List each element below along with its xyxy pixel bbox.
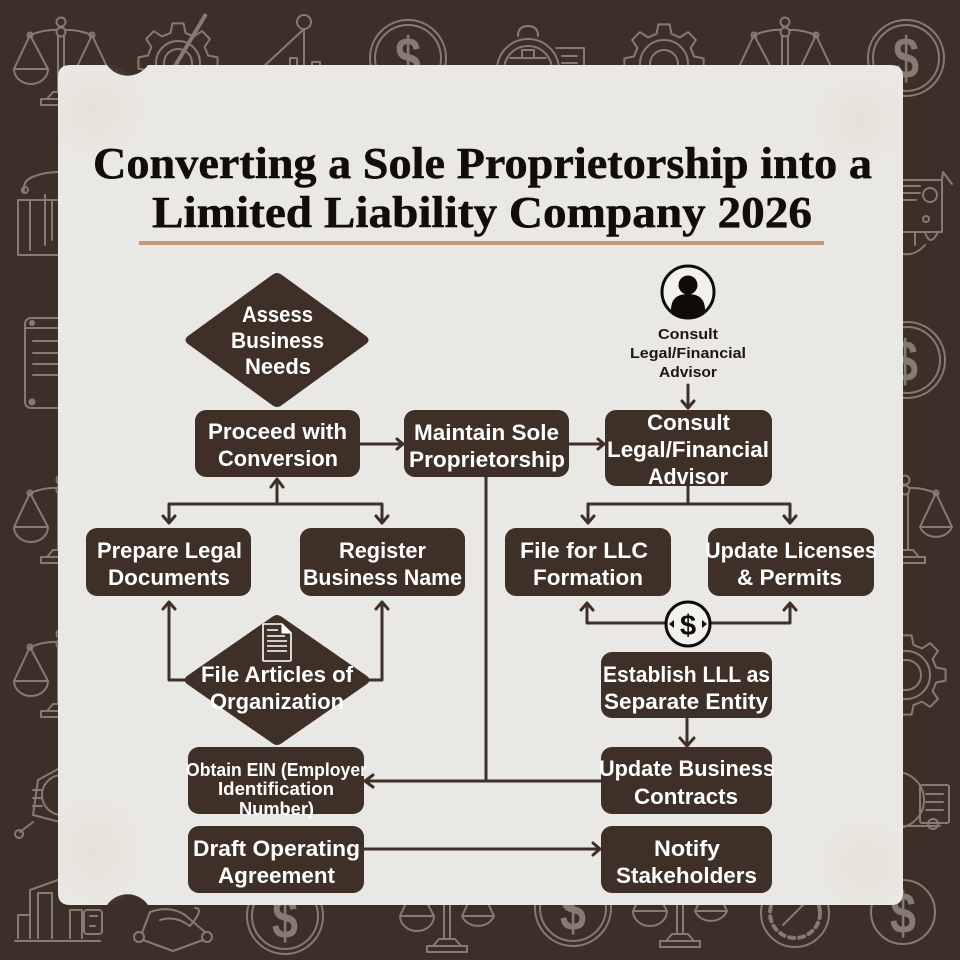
- step: Register Business Name: Register: [339, 538, 426, 563]
- icon: document panel: [25, 318, 75, 408]
- step: Register Business Name: Business Name: [303, 565, 462, 590]
- icon: dollar coin connector: $: [680, 610, 696, 642]
- icon: growth chart: [262, 15, 320, 68]
- icon: dollar coin top: [370, 20, 446, 96]
- icon: dollar coin connector: [666, 602, 710, 646]
- title: [93, 139, 872, 237]
- step: Register Business Name: [300, 528, 465, 596]
- icon: advisor person: [662, 266, 714, 318]
- title: Limited Liability Company 2026: [152, 188, 812, 237]
- icon: scales top left: [14, 18, 108, 105]
- icon: dollar coin right: [869, 322, 945, 398]
- icon: scales top right: [738, 18, 832, 105]
- step: Proceed with Conversion: Conversion: [218, 446, 338, 471]
- step: Obtain EIN: Number): [239, 799, 314, 819]
- icon: dollar coin top: $: [395, 26, 421, 91]
- step: Prepare Legal Documents: Prepare Legal: [97, 538, 242, 563]
- step: Consult Legal/Financial Advisor: Legal/Financial: [607, 437, 769, 462]
- decision: File Articles of Organization: Organization: [210, 689, 344, 714]
- step: Establish LLL as Separate Entity: Establish LLL as: [603, 662, 770, 687]
- icon: machine left: [15, 768, 82, 838]
- icon: gear with needle: [138, 14, 218, 103]
- advisor caption: Consult: [658, 326, 718, 343]
- icon: dollar coin top right: $: [893, 26, 919, 91]
- title underline: [139, 241, 824, 245]
- icon: dollar coin right: $: [892, 329, 918, 394]
- connector arrows: [163, 385, 796, 855]
- decision: File Articles of Organization: File Articles of: [201, 662, 354, 687]
- advisor caption: [630, 326, 746, 381]
- step: Proceed with Conversion: Proceed with: [208, 419, 347, 444]
- step: Consult Legal/Financial Advisor: Consult: [647, 410, 731, 435]
- icon: books: [18, 172, 60, 255]
- step: Update Licenses and Permits: Update Licenses: [705, 538, 877, 563]
- step: Draft Operating Agreement: Draft Operating: [193, 836, 360, 861]
- title: Converting a Sole Proprietorship into a: [93, 139, 872, 188]
- advisor caption: Legal/Financial: [630, 345, 746, 362]
- icon: bar chart building: [15, 880, 102, 941]
- step: Prepare Legal Documents: Documents: [108, 565, 230, 590]
- advisor caption: Advisor: [659, 364, 717, 381]
- step: Update Business Contracts: [599, 747, 775, 814]
- step: File for LLC Formation: File for LLC: [520, 538, 648, 563]
- step: Maintain Sole Proprietorship: Proprietorship: [409, 447, 565, 472]
- step: Obtain EIN: Obtain EIN (Employer: [186, 760, 367, 780]
- step: Update Business Contracts: Contracts: [634, 784, 738, 809]
- icon: dollar coin bottom 1: $: [272, 886, 298, 951]
- step: Notify Stakeholders: Notify: [654, 836, 721, 861]
- icon: document: [263, 624, 291, 661]
- step: Obtain EIN: Identification: [218, 779, 334, 799]
- icon: printer right: [900, 172, 952, 254]
- icon: scales bottom 2: [633, 860, 727, 947]
- icon: scales left upper: [14, 476, 108, 563]
- icon: scales right: [858, 476, 952, 563]
- icon: handshake: [134, 908, 212, 951]
- step: Establish LLL as Separate Entity: [601, 652, 772, 718]
- step: Consult Legal/Financial Advisor: Advisor: [648, 464, 728, 489]
- icon: dollar coin bottom 2: $: [560, 878, 586, 943]
- icon: dollar coin bottom right: [871, 880, 935, 946]
- step: Update Business Contracts: Update Business: [599, 756, 775, 781]
- icon: gear top: [624, 24, 704, 104]
- step: Update Licenses and Permits: & Permits: [737, 565, 842, 590]
- icon: dollar coin bottom 2: [535, 870, 611, 946]
- step: Maintain Sole Proprietorship: Maintain Sole: [414, 420, 559, 445]
- step: Establish LLL as Separate Entity: Separate Entity: [604, 689, 769, 714]
- step: Draft Operating Agreement: [188, 826, 364, 893]
- decision: Assess Business Needs: Assess: [242, 302, 313, 327]
- icon: scales bottom 1: [400, 864, 494, 952]
- step: Notify Stakeholders: Stakeholders: [616, 863, 757, 888]
- decision: File Articles of Organization: [184, 615, 370, 745]
- icon: compass dial: [761, 879, 829, 947]
- icon: scales left lower: [14, 630, 108, 717]
- step: Consult Legal/Financial Advisor: [605, 410, 772, 489]
- decision: Assess Business Needs: Needs: [245, 354, 311, 379]
- step: Maintain Sole Proprietorship: [404, 410, 569, 477]
- step: Obtain EIN: [186, 747, 367, 819]
- icon: gear right: [866, 635, 946, 715]
- step: Notify Stakeholders: [601, 826, 772, 893]
- step: Proceed with Conversion: [195, 410, 360, 477]
- decision: Assess Business Needs: Business: [231, 328, 324, 353]
- icon: dollar coin top right: [868, 20, 944, 96]
- decision: Assess Business Needs: [186, 273, 368, 407]
- step: Update Licenses and Permits: [705, 528, 877, 596]
- step: File for LLC Formation: Formation: [533, 565, 643, 590]
- icon: briefcase right: [868, 772, 949, 829]
- icon: dollar coin bottom 1: [247, 878, 323, 954]
- icon: dollar coin bottom right: $: [890, 881, 916, 946]
- icon: briefcase clock: [497, 26, 584, 101]
- step: Draft Operating Agreement: Agreement: [218, 863, 336, 888]
- step: Prepare Legal Documents: [86, 528, 251, 596]
- step: File for LLC Formation: [505, 528, 671, 596]
